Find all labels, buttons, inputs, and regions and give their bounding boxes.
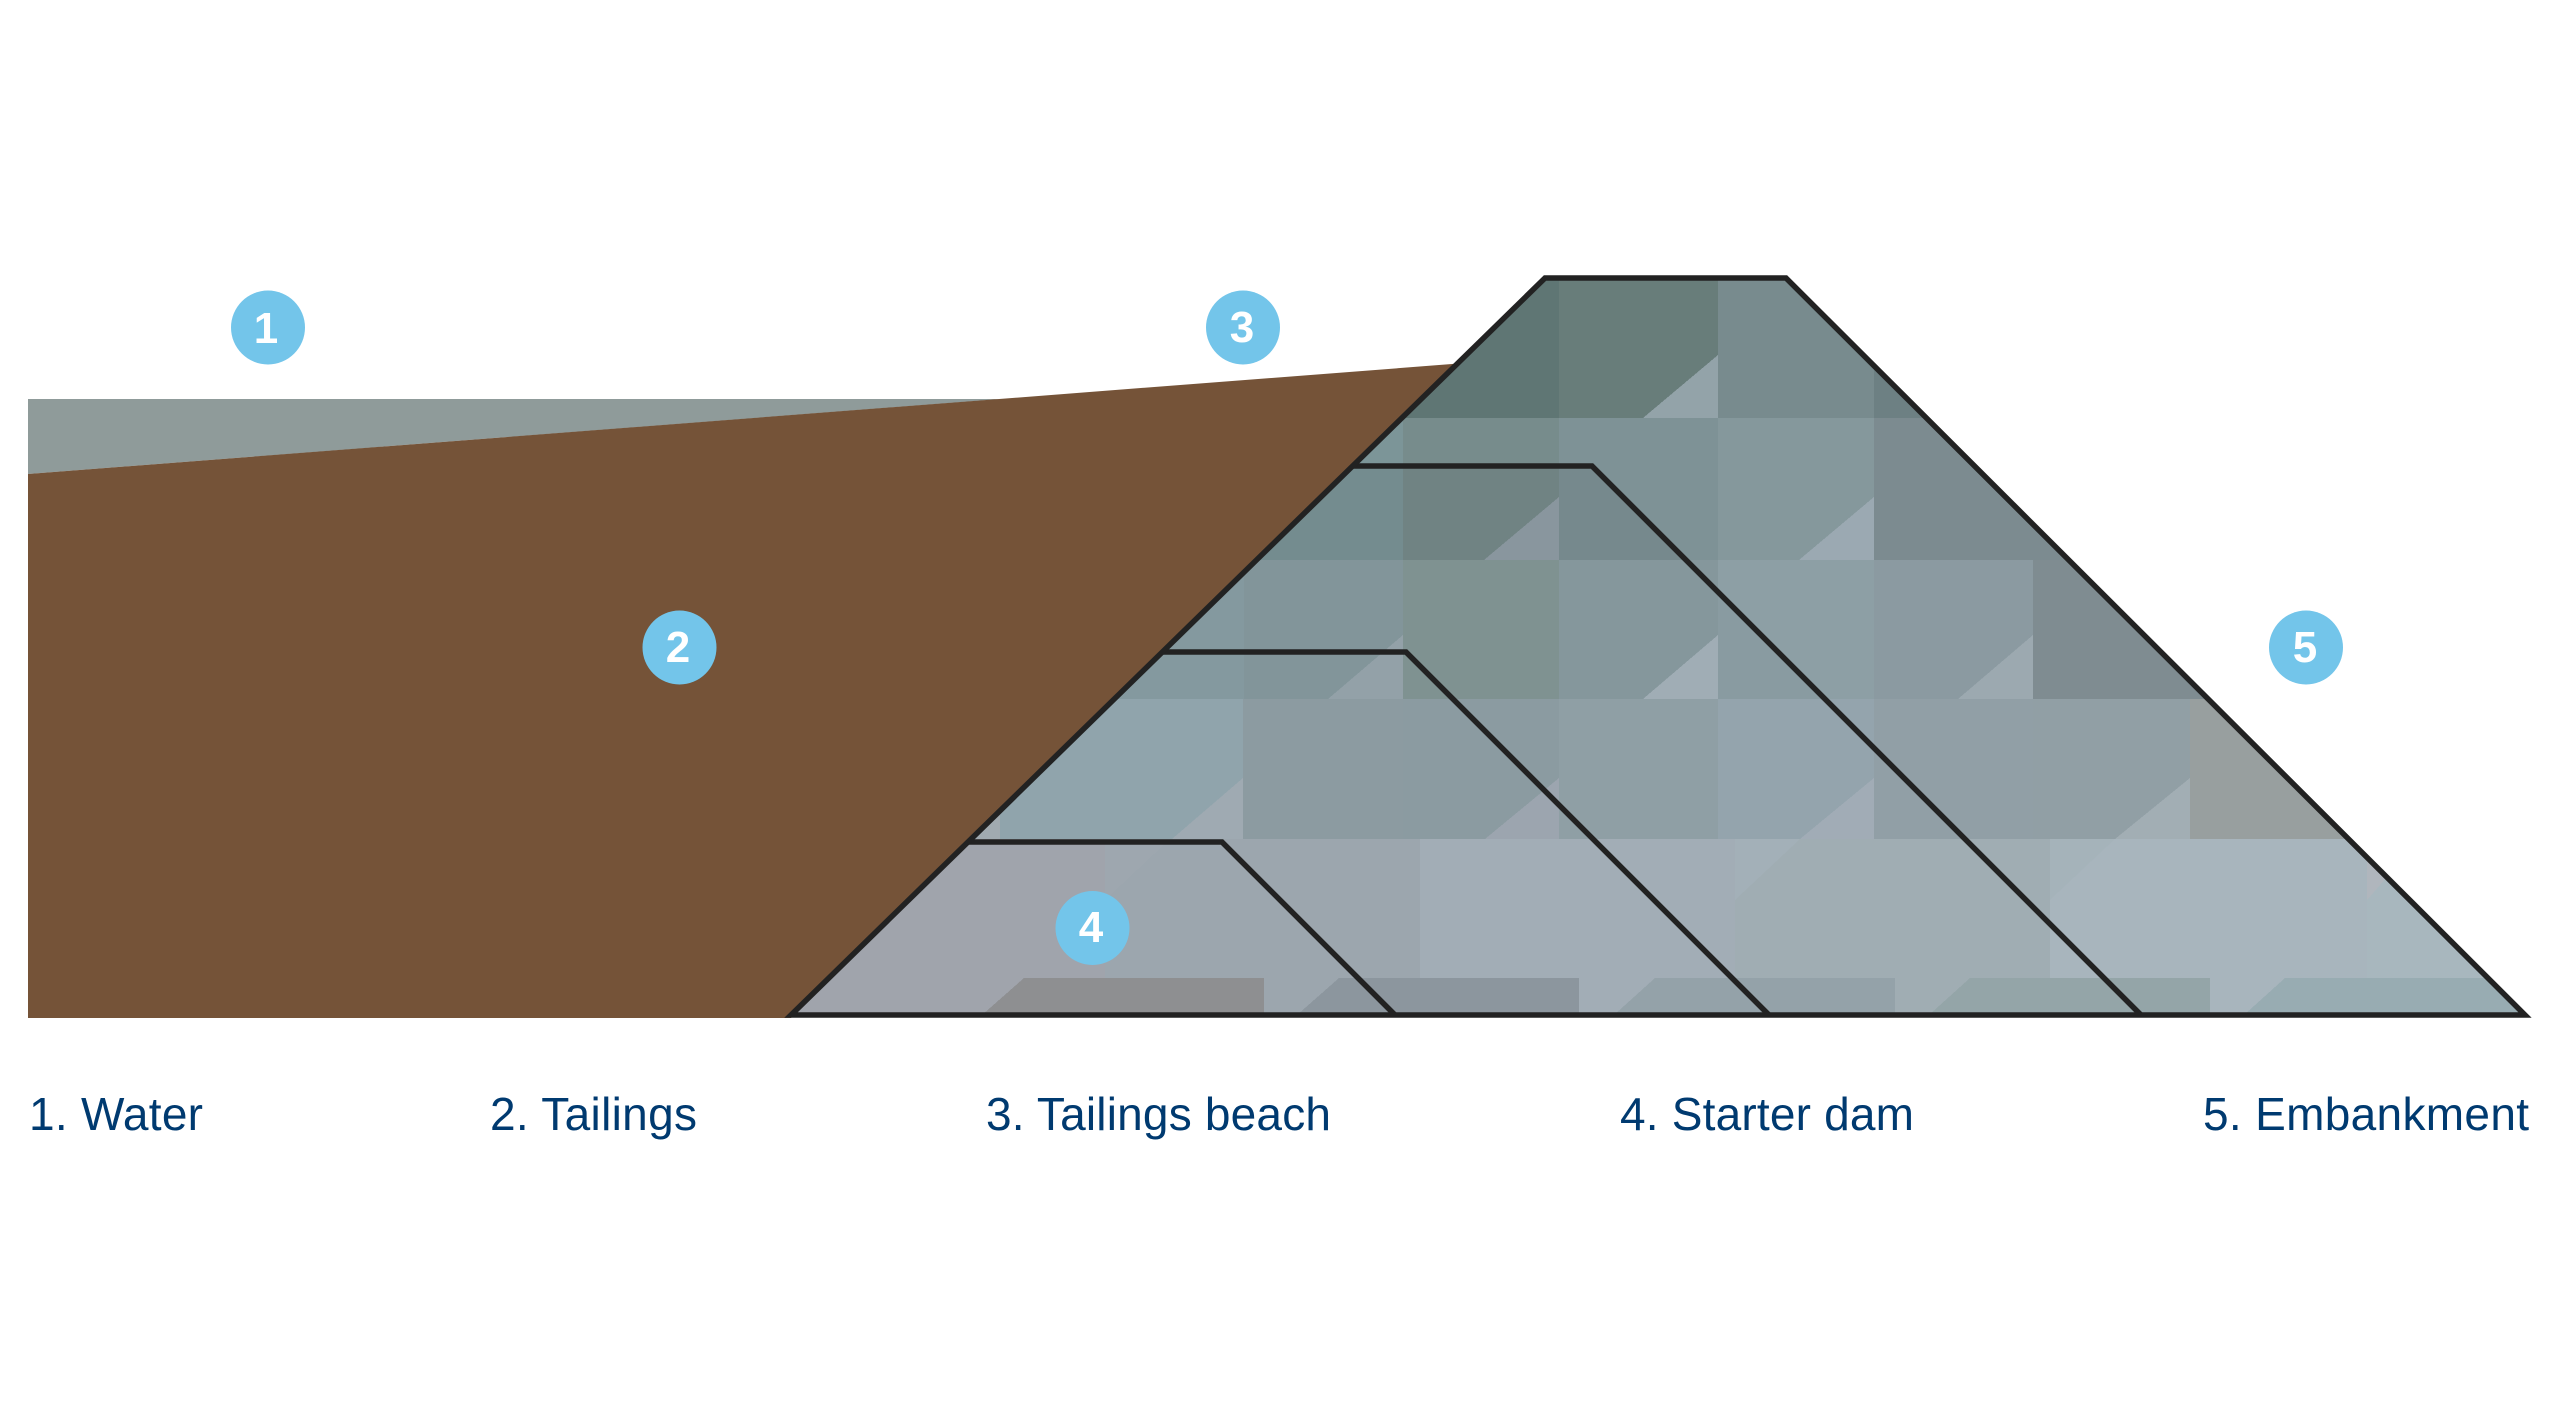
middle raise outline	[1162, 652, 1769, 1015]
starter dam outline	[968, 842, 1395, 1015]
marker 5: embankment	[2269, 610, 2343, 684]
legend label: tailings: 2. Tailings	[490, 1088, 697, 1140]
dam mosaic texture	[780, 270, 2540, 1020]
upper raise outline	[1352, 466, 2141, 1015]
marker 4: starter dam	[1056, 891, 1130, 965]
marker 2: tailings: 2	[666, 623, 690, 672]
dam embankment	[780, 270, 2540, 1020]
dam outer outline	[791, 278, 2525, 1015]
legend label: water: 1. Water	[29, 1088, 203, 1140]
marker 3: tailings beach	[1206, 290, 1280, 364]
marker 2: tailings	[642, 610, 716, 684]
legend label: tailings beach: 3. Tailings beach	[986, 1088, 1331, 1140]
marker 1: water	[231, 290, 305, 364]
upper tier shading	[1261, 469, 1682, 560]
marker 3: tailings beach: 3	[1230, 303, 1254, 352]
marker 4: starter dam: 4	[1079, 903, 1104, 952]
marker 5: embankment: 5	[2293, 623, 2317, 672]
infographic: tailings dam cross-section	[28, 275, 2532, 1140]
water layer	[28, 399, 1001, 474]
tailings layer	[28, 363, 1460, 1018]
marker 1: water: 1	[254, 304, 278, 353]
legend label: embankment: 5. Embankment	[2203, 1088, 2529, 1140]
legend label: starter dam: 4. Starter dam	[1620, 1088, 1914, 1140]
